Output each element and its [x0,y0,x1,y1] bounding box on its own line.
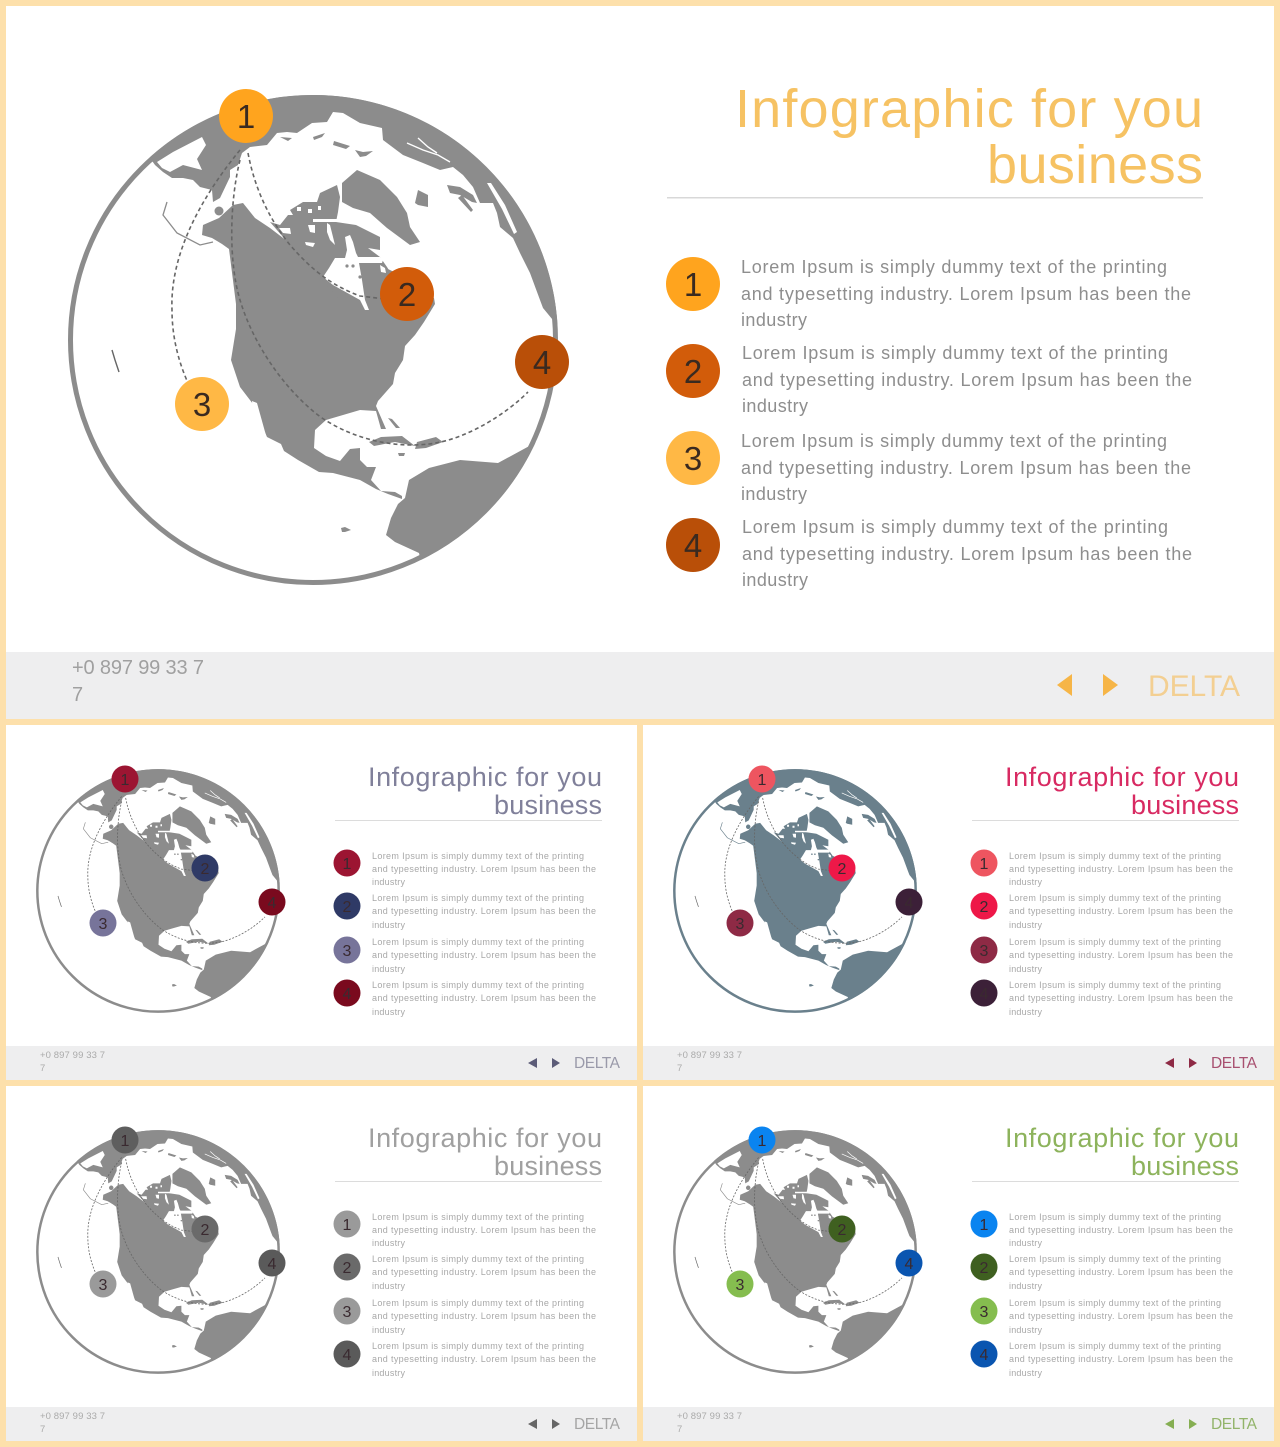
list item 4: industry [742,570,808,590]
list items: 1 [980,856,989,873]
markers: 4 [268,1256,277,1273]
footer bar: 7 [72,684,83,706]
marker 2 [380,267,434,321]
globe map [37,742,301,1040]
footer bar: 7 [677,1063,682,1074]
list items: and typesetting industry. Lorem Ipsum has been the [372,950,596,960]
footer bar: 7 [40,1424,45,1435]
panel: main slide [6,6,1274,719]
list items: Lorem Ipsum is simply dummy text of the printing [1009,893,1221,903]
list items [970,850,1233,1017]
list item 4 [666,517,1192,590]
list items [970,1210,1233,1378]
markers [726,766,922,936]
footer bar: 7 [40,1063,45,1074]
footer bar: +0 897 99 33 7 [72,657,204,679]
list items: industry [372,1281,406,1291]
title [368,1123,602,1181]
footer bar: +0 897 99 33 7 [40,1411,105,1422]
list items: Lorem Ipsum is simply dummy text of the printing [1009,1341,1221,1351]
markers: 1 [121,772,130,789]
markers: 3 [736,916,745,933]
list item 3: 3 [684,440,702,477]
list items: Lorem Ipsum is simply dummy text of the printing [372,980,584,990]
list items: and typesetting industry. Lorem Ipsum has been the [372,1267,596,1277]
list items: 4 [343,986,352,1003]
title [1005,762,1239,820]
list items: and typesetting industry. Lorem Ipsum has been the [1009,1311,1233,1321]
list items: 2 [980,1260,989,1277]
footer bar [643,1407,1274,1441]
list items: industry [372,1325,406,1335]
panel: slide variant green and blue [643,1086,1274,1441]
list items: 1 [980,1217,989,1234]
list items: industry [1009,1238,1042,1248]
list items: and typesetting industry. Lorem Ipsum has been the [1009,1354,1233,1364]
title: business [494,790,602,820]
title [1005,1123,1239,1181]
list items: 3 [980,1304,989,1321]
marker 3 [175,377,229,431]
list items: Lorem Ipsum is simply dummy text of the printing [1009,851,1221,861]
footer bar: DELTA [574,1055,621,1072]
list items: Lorem Ipsum is simply dummy text of the printing [372,1298,584,1308]
panel: slide variant navy [6,725,637,1080]
footer bar: +0 897 99 33 7 [677,1050,742,1061]
list item 1 [666,257,1191,330]
list item 2: Lorem Ipsum is simply dummy text of the printing [742,343,1168,363]
list items: and typesetting industry. Lorem Ipsum has been the [1009,906,1233,916]
list items: and typesetting industry. Lorem Ipsum has been the [372,993,596,1003]
list item 4: 4 [684,527,702,564]
list items: and typesetting industry. Lorem Ipsum has been the [372,1354,596,1364]
list item 2: and typesetting industry. Lorem Ipsum has been the [742,370,1192,390]
list items: and typesetting industry. Lorem Ipsum has been the [1009,950,1233,960]
marker 2: 2 [398,276,416,313]
footer bar: DELTA [1148,670,1240,703]
footer bar: DELTA [1211,1055,1258,1072]
list items: and typesetting industry. Lorem Ipsum has been the [372,864,596,874]
footer bar: +0 897 99 33 7 [40,1050,105,1061]
list items: 2 [343,1260,352,1277]
title: Infographic for you [1005,1123,1239,1153]
title: Infographic for you [368,762,602,792]
footer bar: +0 897 99 33 7 [677,1411,742,1422]
list items: 3 [343,943,352,960]
list item 3: and typesetting industry. Lorem Ipsum has been the [741,458,1191,478]
markers: 4 [268,895,277,912]
list item 2 [666,343,1192,416]
list items: industry [1009,1368,1042,1378]
list items: 4 [980,1347,989,1364]
list items: Lorem Ipsum is simply dummy text of the printing [1009,980,1221,990]
list items: and typesetting industry. Lorem Ipsum has been the [1009,1225,1233,1235]
markers: 2 [201,1222,210,1239]
footer bar: DELTA [574,1416,621,1433]
list items: industry [1009,1281,1042,1291]
list items: industry [1009,1325,1042,1335]
marker 3: 3 [193,386,211,423]
list items: and typesetting industry. Lorem Ipsum has been the [1009,993,1233,1003]
list items: industry [1009,1007,1042,1017]
markers: 4 [905,1256,914,1273]
list items: Lorem Ipsum is simply dummy text of the printing [372,893,584,903]
footer bar [6,1046,637,1080]
globe map [674,742,938,1040]
marker 4 [515,335,569,389]
list item 1: Lorem Ipsum is simply dummy text of the printing [741,257,1167,277]
list items: 1 [343,1217,352,1234]
title: business [494,1151,602,1181]
list item 4: and typesetting industry. Lorem Ipsum has been the [742,544,1192,564]
list items: 1 [343,856,352,873]
list items: and typesetting industry. Lorem Ipsum has been the [1009,864,1233,874]
list item 1: and typesetting industry. Lorem Ipsum has been the [741,284,1191,304]
list item 3 [666,431,1191,504]
panel: slide variant grey [6,1086,637,1441]
list items: industry [372,877,406,887]
marker 1 [219,89,273,143]
list items: 2 [980,899,989,916]
globe map [37,1103,301,1401]
list items [334,1210,596,1378]
list item 3: industry [741,484,807,504]
markers: 3 [99,916,108,933]
list items: Lorem Ipsum is simply dummy text of the printing [372,1212,584,1222]
list items: 4 [980,986,989,1003]
footer bar [643,1046,1274,1080]
footer bar [6,1407,637,1441]
list items: and typesetting industry. Lorem Ipsum has been the [372,906,596,916]
list item 1: 1 [684,266,702,303]
markers: 4 [905,895,914,912]
list items: Lorem Ipsum is simply dummy text of the printing [1009,937,1221,947]
marker 4: 4 [533,344,551,381]
markers [726,1126,922,1298]
list items: Lorem Ipsum is simply dummy text of the printing [372,851,584,861]
list items: industry [372,1238,406,1248]
list item 3: Lorem Ipsum is simply dummy text of the printing [741,431,1167,451]
markers: 1 [121,1133,130,1150]
footer bar: 7 [677,1424,682,1435]
title [735,79,1203,195]
list items: 3 [980,943,989,960]
title: Infographic for you [735,79,1203,139]
list items: and typesetting industry. Lorem Ipsum has been the [1009,1267,1233,1277]
list items: industry [372,1368,406,1378]
globe map [674,1103,938,1401]
list items: industry [1009,877,1042,887]
list items: Lorem Ipsum is simply dummy text of the printing [372,937,584,947]
list items: Lorem Ipsum is simply dummy text of the printing [1009,1298,1221,1308]
list items: industry [372,920,406,930]
list items: industry [372,1007,406,1017]
title [368,762,602,820]
markers [90,1126,286,1298]
list items: 4 [343,1347,352,1364]
list items: industry [1009,964,1042,974]
markers: 3 [736,1277,745,1294]
list items: Lorem Ipsum is simply dummy text of the printing [1009,1254,1221,1264]
globe map [70,40,600,640]
list item 1: industry [741,310,807,330]
list items: 2 [343,899,352,916]
title: business [1131,1151,1239,1181]
list items: 3 [343,1304,352,1321]
list items: industry [1009,920,1042,930]
list item 2: 2 [684,353,702,390]
title: Infographic for you [1005,762,1239,792]
title: Infographic for you [368,1123,602,1153]
footer bar: DELTA [1211,1416,1258,1433]
title: business [987,135,1203,195]
title: business [1131,790,1239,820]
panel: slide variant crimson [643,725,1274,1080]
list item 2: industry [742,396,808,416]
list items [334,850,596,1017]
list items: Lorem Ipsum is simply dummy text of the printing [372,1341,584,1351]
list items: Lorem Ipsum is simply dummy text of the printing [1009,1212,1221,1222]
footer bar [6,652,1274,719]
markers: 3 [99,1277,108,1294]
markers: 2 [838,861,847,878]
markers: 1 [758,1133,767,1150]
markers [90,766,286,936]
list items: and typesetting industry. Lorem Ipsum has been the [372,1225,596,1235]
list item 4: Lorem Ipsum is simply dummy text of the printing [742,517,1168,537]
list items: industry [372,964,406,974]
list items: and typesetting industry. Lorem Ipsum has been the [372,1311,596,1321]
markers: 2 [201,861,210,878]
list items: Lorem Ipsum is simply dummy text of the printing [372,1254,584,1264]
marker 1: 1 [237,98,255,135]
markers: 2 [838,1222,847,1239]
markers: 1 [758,772,767,789]
